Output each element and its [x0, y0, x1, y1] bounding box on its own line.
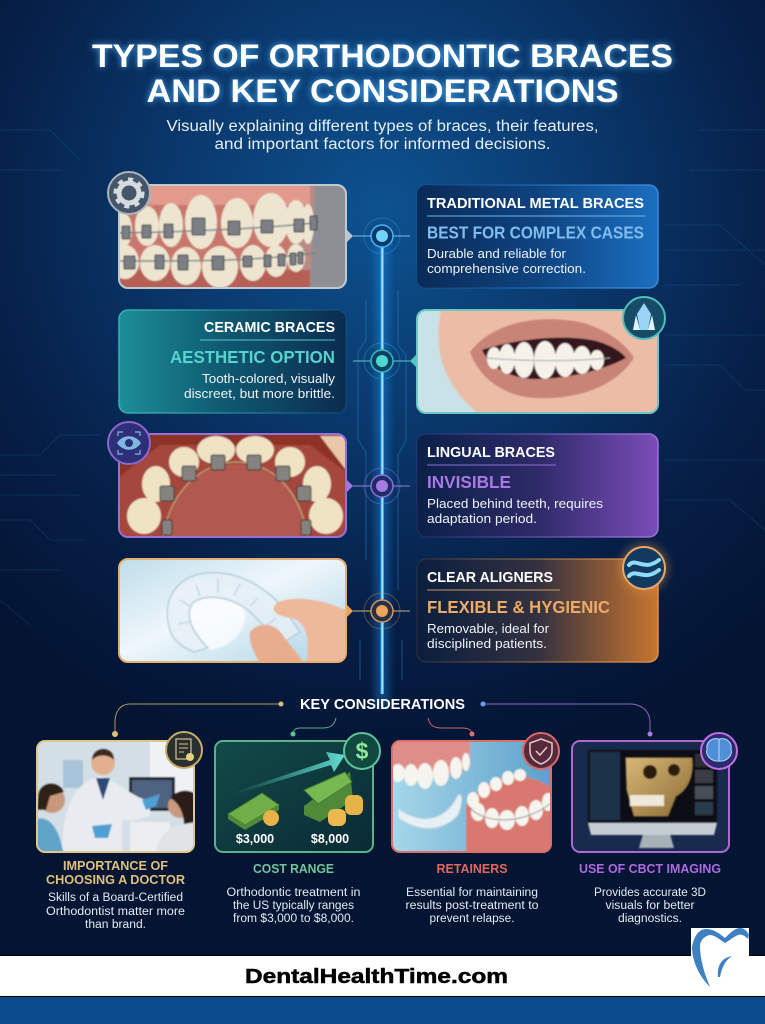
footer band: DentalHealthTime.com [245, 966, 508, 988]
card image: cost: $3,000 [236, 832, 274, 846]
icon: gear [108, 172, 150, 214]
heading: key considerations: KEY CONSIDERATIONS [300, 696, 465, 713]
text: importance of choosing a doctor: Orthodontist matter more [46, 906, 185, 918]
icon: crystal [623, 297, 665, 339]
panel: traditional metal braces: comprehensive correction. [427, 261, 586, 276]
icon: eye [108, 422, 150, 464]
text: use of cbct imaging: USE OF CBCT IMAGING [579, 862, 721, 876]
panel: lingual braces: LINGUAL BRACES [427, 444, 555, 461]
panel: lingual braces: INVISIBLE [427, 472, 511, 492]
connector: imaging [480, 702, 652, 736]
icon: dollar: $ [356, 738, 369, 764]
photo: clear aligners [115, 555, 350, 667]
panel: clear aligners [417, 559, 658, 662]
panel: traditional metal braces: Durable and reliable for [427, 246, 567, 261]
text: importance of choosing a doctor: Skills of a Board-Certified [48, 892, 183, 904]
subtitle: Visually explaining different types of braces, their features, [166, 118, 598, 135]
title: AND KEY CONSIDERATIONS [146, 73, 618, 109]
panel: ceramic braces: AESTHETIC OPTION [170, 347, 335, 367]
money stack small [228, 793, 279, 830]
money stack large [304, 772, 363, 826]
panel: clear aligners: FLEXIBLE & HYGIENIC [427, 597, 610, 617]
subtitle [166, 118, 598, 153]
panel: clear aligners: disciplined patients. [427, 636, 547, 651]
text: retainers: prevent relapse. [430, 913, 514, 925]
node: lingual braces [346, 468, 410, 504]
text: cost range: Orthodontic treatment in [226, 887, 360, 899]
central timeline [375, 236, 389, 706]
logo: tooth [691, 928, 749, 987]
arrow rising [234, 752, 345, 794]
panel: ceramic braces: Tooth-colored, visually [202, 371, 336, 386]
node: clear aligners [346, 593, 410, 629]
icon: dollar [344, 733, 380, 769]
text: cost range [226, 862, 360, 925]
panel: traditional metal braces: TRADITIONAL METAL BRACES [427, 195, 644, 212]
title [92, 38, 673, 109]
text: use of cbct imaging [579, 862, 721, 925]
panel: lingual braces: adaptation period. [427, 511, 537, 526]
text: cost range: COST RANGE [253, 862, 334, 876]
node: metal braces [346, 218, 410, 254]
text: importance of choosing a doctor: IMPORTANCE OF [63, 859, 168, 873]
panel: lingual braces: Placed behind teeth, requires [427, 496, 604, 511]
icon: waves [619, 543, 669, 593]
photo: ceramic braces smile [416, 309, 659, 414]
photo: traditional metal braces [118, 184, 347, 289]
text: use of cbct imaging: Provides accurate 3D [594, 887, 706, 899]
panel: ceramic braces: CERAMIC BRACES [204, 319, 335, 336]
text: use of cbct imaging: diagnostics. [618, 913, 682, 925]
panel: clear aligners: Removable, ideal for [427, 621, 550, 636]
text: retainers: RETAINERS [436, 862, 508, 876]
connector: retainers [428, 718, 474, 736]
panel: traditional metal braces [417, 185, 658, 288]
subtitle: and important factors for informed decisions. [214, 136, 550, 153]
card image: cost [215, 741, 373, 852]
photo: lingual braces [115, 430, 350, 542]
icon: brain [701, 733, 737, 769]
card image: cost: $8,000 [311, 832, 349, 846]
text: retainers [406, 862, 538, 925]
footer band [0, 955, 765, 1024]
panel: traditional metal braces: BEST FOR COMPLEX CASES [427, 222, 644, 242]
connector: cost [290, 718, 336, 736]
text: importance of choosing a doctor: CHOOSING A DOCTOR [46, 873, 185, 887]
text: retainers: Essential for maintaining [406, 887, 538, 899]
card image: CBCT monitor [572, 741, 729, 852]
icon: certificate [166, 732, 202, 768]
icon: shield [523, 733, 559, 769]
text: cost range: from $3,000 to $8,000. [233, 913, 354, 925]
text: cost range: the US typically ranges [233, 900, 354, 912]
text: use of cbct imaging: visuals for better [606, 900, 695, 912]
panel: ceramic braces [119, 310, 346, 413]
connector: doctor [112, 702, 284, 737]
card image: doctor [33, 737, 198, 856]
text: importance of choosing a doctor [46, 859, 185, 931]
panel: ceramic braces: discreet, but more brittle. [184, 386, 335, 401]
node: ceramic braces [353, 343, 417, 379]
panel: clear aligners: CLEAR ALIGNERS [427, 569, 553, 586]
text: retainers: results post-treatment to [406, 900, 538, 912]
title: TYPES OF ORTHODONTIC BRACES [92, 38, 673, 74]
panel: lingual braces [417, 434, 658, 537]
card image: retainers [388, 737, 555, 856]
text: importance of choosing a doctor: than brand. [85, 919, 146, 931]
